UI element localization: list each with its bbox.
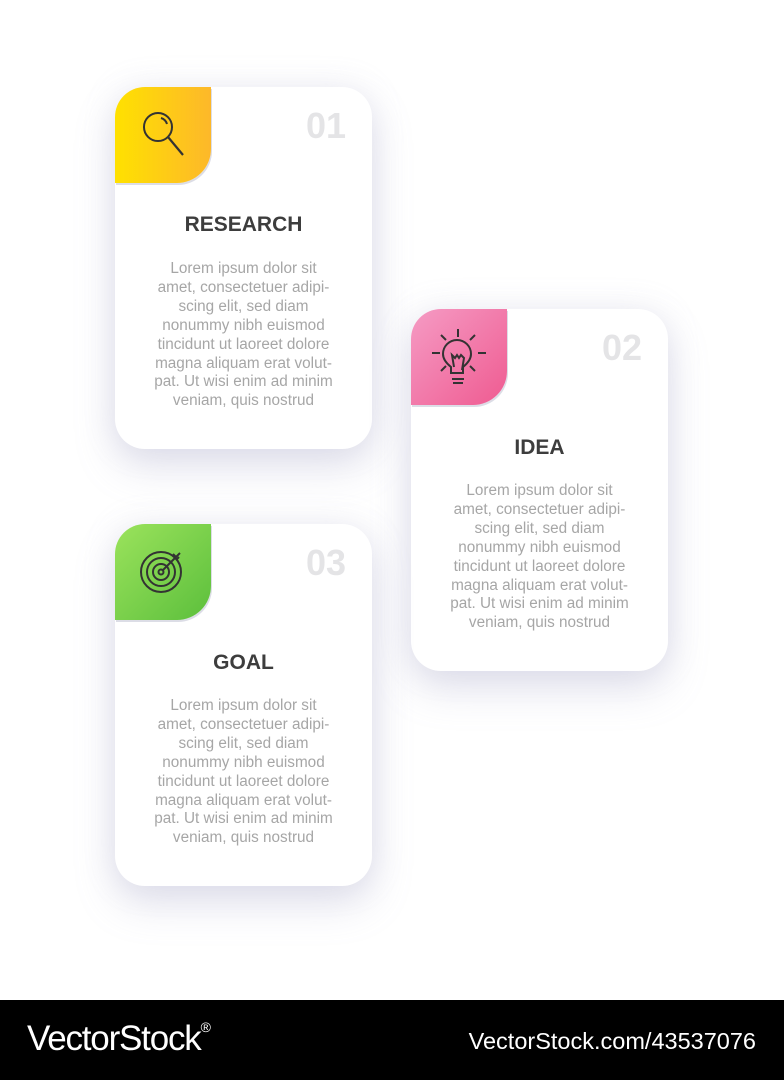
number: 02 [602, 327, 642, 368]
body text: pat. Ut wisi enim ad minim [450, 595, 629, 612]
body text: nonummy nibh euismod [162, 754, 325, 771]
body text [154, 697, 333, 846]
body text: Lorem ipsum dolor sit [466, 482, 613, 499]
body text [154, 260, 333, 409]
heading: RESEARCH [185, 213, 302, 236]
body text: Lorem ipsum dolor sit [170, 260, 317, 277]
body text: scing elit, sed diam [178, 298, 309, 315]
footer logo: VectorStock® [27, 1019, 210, 1058]
body text: amet, consectetuer adipi- [454, 501, 625, 518]
footer id: VectorStock.com/43537076 [469, 1028, 756, 1054]
body text: pat. Ut wisi enim ad minim [154, 373, 333, 390]
body text: pat. Ut wisi enim ad minim [154, 810, 333, 827]
number: 03 [306, 542, 346, 583]
heading: GOAL [213, 651, 274, 674]
body text: scing elit, sed diam [474, 520, 605, 537]
body text: veniam, quis nostrud [173, 829, 314, 846]
body text: magna aliquam erat volut- [155, 792, 332, 809]
heading: IDEA [514, 436, 565, 459]
icon tab: target [115, 524, 211, 620]
body text: amet, consectetuer adipi- [158, 279, 329, 296]
icon tab: bulb [411, 309, 507, 405]
number: 01 [306, 105, 346, 146]
body text: nonummy nibh euismod [458, 539, 621, 556]
body text: magna aliquam erat volut- [155, 355, 332, 372]
footer bar [0, 1000, 784, 1080]
card 01: research [115, 87, 372, 449]
body text: amet, consectetuer adipi- [158, 716, 329, 733]
card 03: goal [115, 524, 372, 886]
body text: tincidunt ut laoreet dolore [158, 336, 329, 353]
card 02: idea [411, 309, 668, 671]
body text: nonummy nibh euismod [162, 317, 325, 334]
icon tab: magnifier [115, 87, 211, 183]
body text: veniam, quis nostrud [173, 392, 314, 409]
body text: tincidunt ut laoreet dolore [454, 558, 625, 575]
body text: tincidunt ut laoreet dolore [158, 773, 329, 790]
body text [450, 482, 629, 631]
body text: Lorem ipsum dolor sit [170, 697, 317, 714]
body text: magna aliquam erat volut- [451, 577, 628, 594]
body text: scing elit, sed diam [178, 735, 309, 752]
body text: veniam, quis nostrud [469, 614, 610, 631]
